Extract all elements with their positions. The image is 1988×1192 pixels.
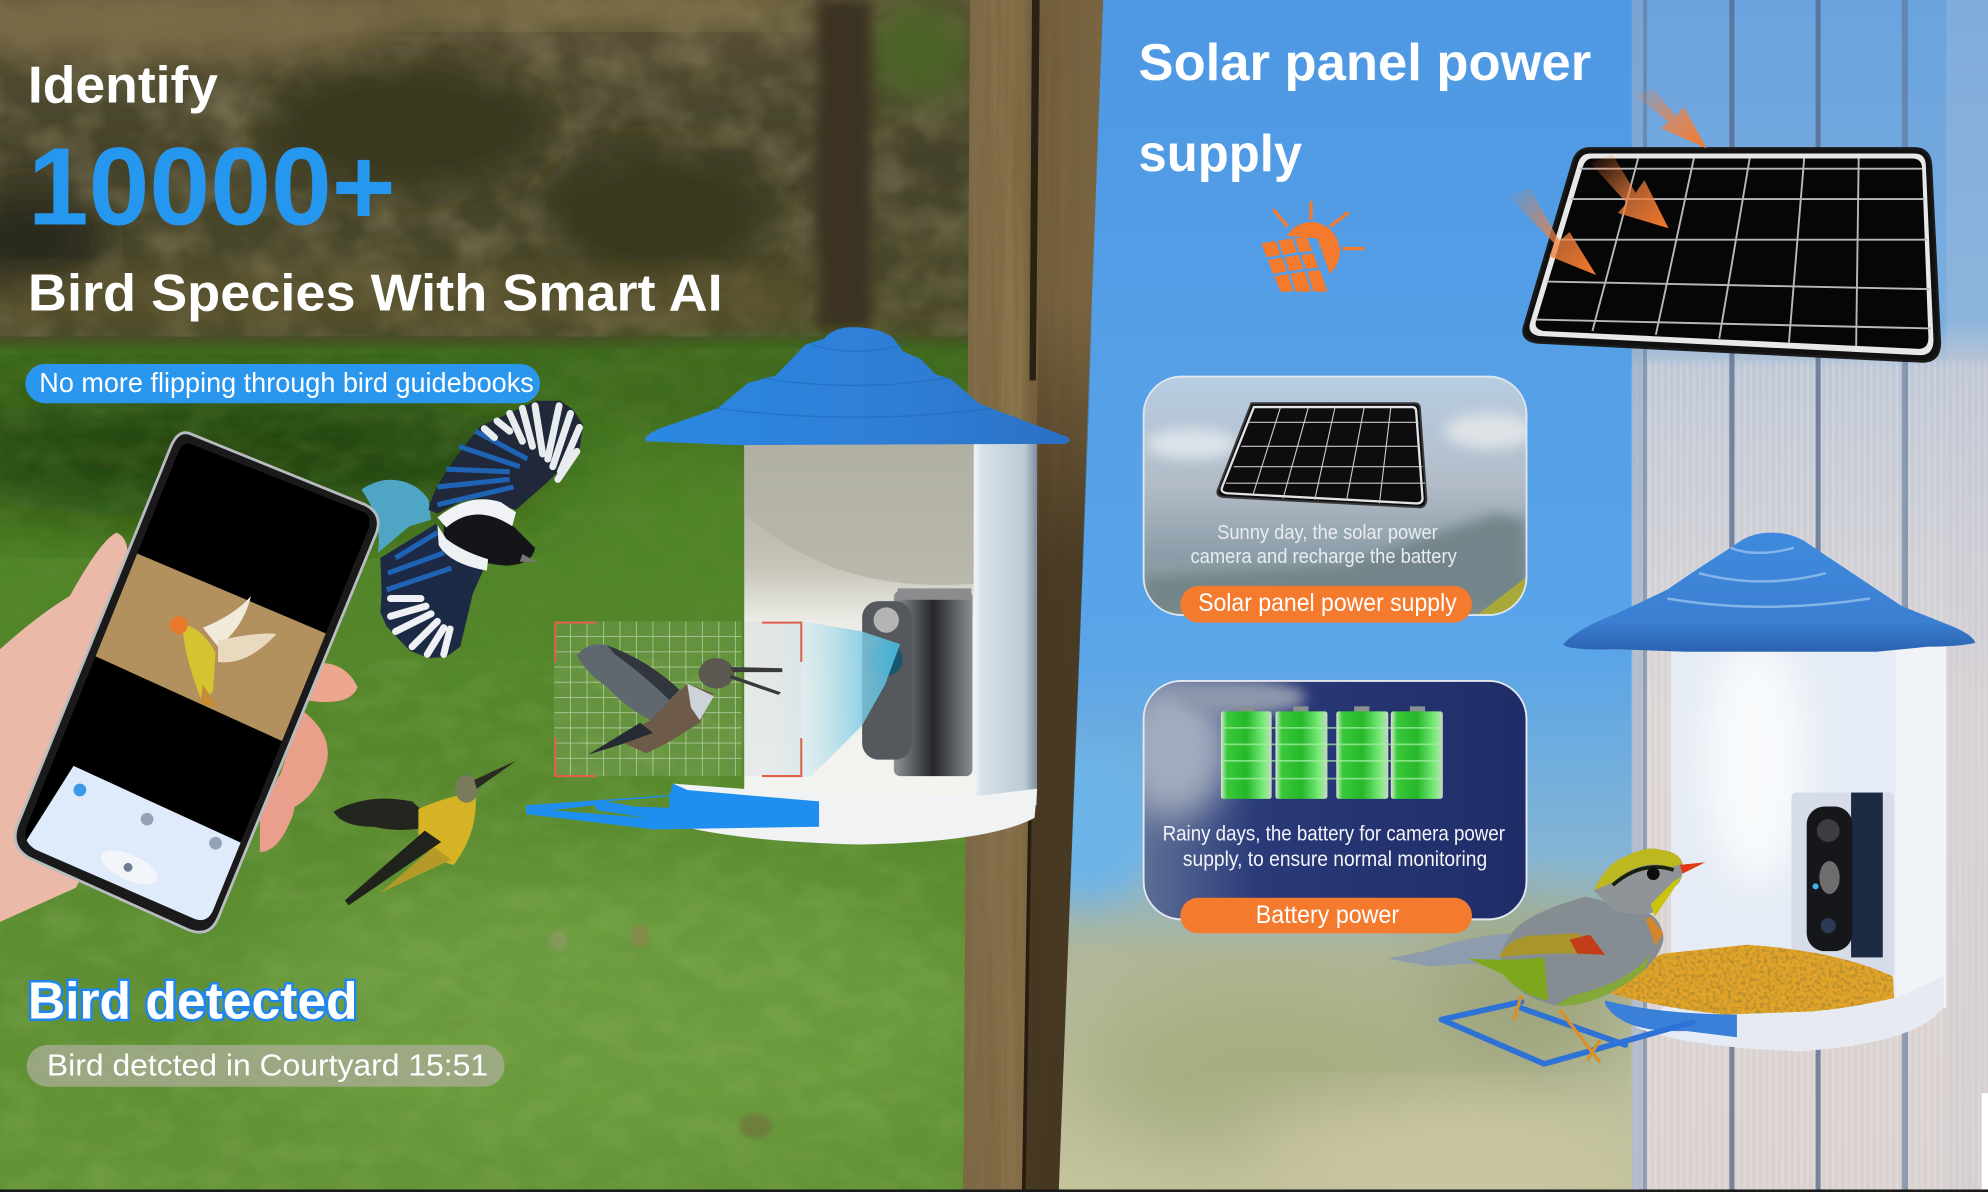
small solar panel [1217, 403, 1426, 507]
camera beam [773, 616, 900, 779]
panel: solar background sky [1058, 0, 1632, 1190]
pill: no more flipping through bird guidebooks: No more flipping through bird guidebooks [39, 367, 534, 398]
heading: solar panel power supply [1139, 34, 1591, 183]
icon: hand holding phone [0, 431, 380, 934]
panel: siding wall [1632, 0, 1988, 1192]
body [1501, 897, 1663, 1006]
heading: solar panel power supply: Solar panel power [1139, 34, 1591, 92]
parrot on phone [170, 596, 276, 708]
body [444, 511, 535, 566]
image card: sunny day solar [1144, 377, 1535, 623]
phone body [14, 431, 380, 934]
image card: sunny day solar: camera and recharge the battery [1191, 546, 1458, 568]
feeder: left product [526, 327, 1069, 845]
icon: batteries [1221, 706, 1443, 799]
feeder base [673, 784, 1037, 845]
arrows: sunlight on solar panel [1509, 89, 1707, 275]
feeder body interior [744, 437, 976, 805]
chart: recognition grid [554, 621, 801, 776]
pill: solar panel power supply: Solar panel power supply [1198, 589, 1457, 617]
heading: 10000+: 10000+ [28, 125, 396, 248]
seeds [1610, 944, 1894, 1014]
roof [645, 327, 1069, 445]
large solar panel [1524, 148, 1940, 361]
panel: garden background [0, 0, 1002, 1192]
heading: bird detected: Bird detected [28, 972, 358, 1030]
pill: battery power: Battery power [1256, 901, 1400, 929]
icon: perched bird [1387, 849, 1705, 1063]
icon: hummingbird at feeder [577, 644, 782, 755]
feeder right column [974, 437, 1037, 805]
text: rainy day caption: Rainy days, the battery for camera power [1163, 821, 1505, 846]
tray [1442, 976, 1944, 1064]
body [1636, 640, 1946, 1051]
tail [361, 480, 431, 553]
perch tray [526, 784, 819, 829]
heading: solar panel power supply: supply [1139, 125, 1302, 183]
image card: rainy day battery: supply, to ensure normal monitoring [1183, 846, 1487, 871]
green belly [1468, 957, 1548, 1001]
pill: battery power [1180, 898, 1472, 933]
wooden post [957, 0, 1109, 1192]
lower wing [380, 524, 483, 658]
pill: bird detected notification: Bird detcted in Courtyard 15:51 [47, 1048, 488, 1082]
upper wing [429, 401, 583, 514]
icon: magpie in flight [361, 401, 583, 658]
feeder: right product [1442, 533, 1975, 1064]
image card: rainy day battery [1116, 678, 1526, 933]
heading: Bird Species With Smart AI: Bird Species With Smart AI [28, 265, 723, 323]
pill: solar panel power supply [1180, 586, 1472, 623]
wing [1499, 933, 1605, 957]
tail [1387, 933, 1521, 966]
roof [1563, 533, 1975, 652]
head [1594, 849, 1683, 914]
text: sunny day caption: Sunny day, the solar power [1217, 522, 1438, 544]
camera [862, 588, 972, 776]
icon: yellow hummingbird [333, 761, 516, 905]
heading: Identify: Identify [28, 57, 218, 115]
camera [1807, 793, 1883, 957]
icon: sun with solar panel [1262, 203, 1363, 292]
